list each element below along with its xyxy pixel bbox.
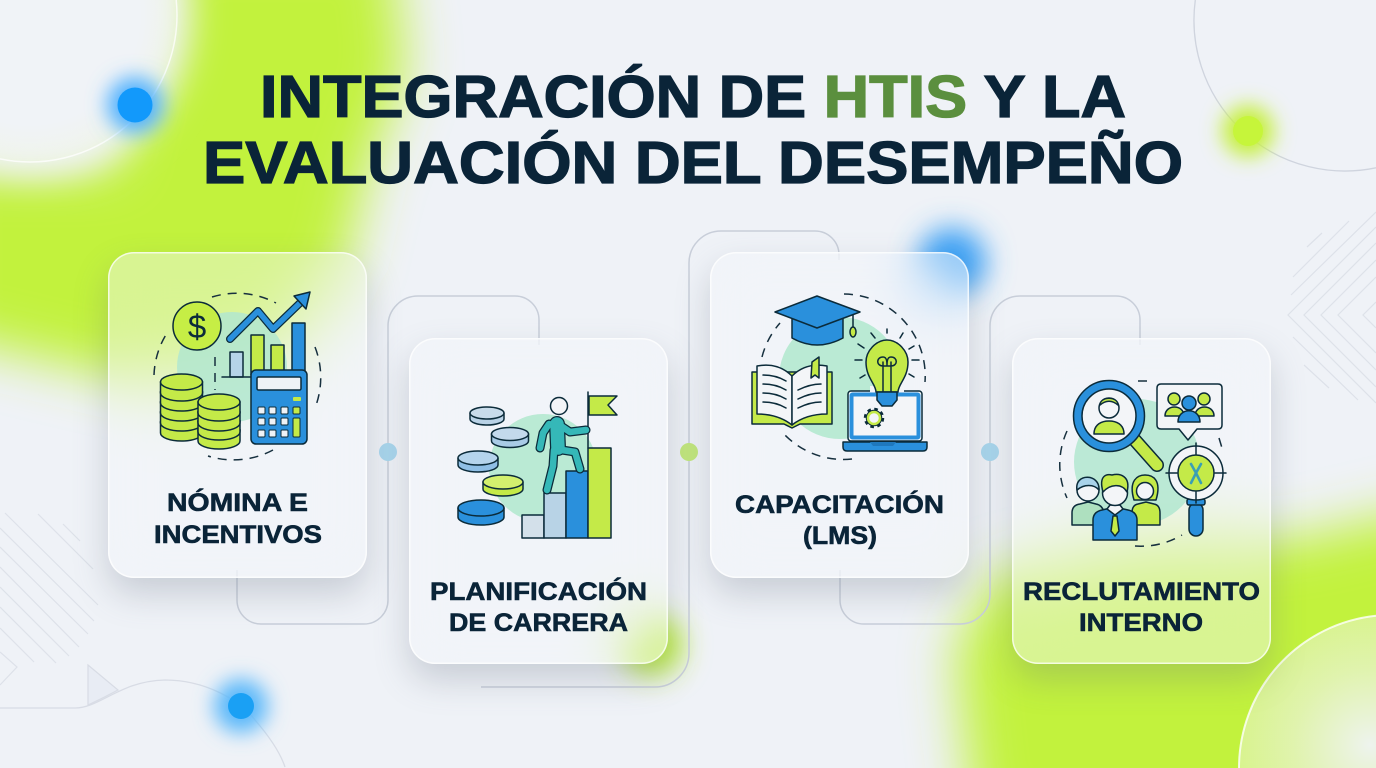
connector lines <box>237 231 1140 687</box>
label: capacitación lms: (LMS) <box>803 522 877 550</box>
green blob top left <box>10 10 475 455</box>
soft white haze around top left circle <box>20 5 340 325</box>
panel: nómina e incentivos <box>108 252 367 578</box>
label: nómina e incentivos: INCENTIVOS <box>154 521 322 549</box>
wave line bottom left <box>0 665 285 767</box>
label: planificación de carrera: DE CARRERA <box>449 609 628 637</box>
icon: money and growth: $ <box>188 308 206 345</box>
green blob bottom right <box>885 435 1370 760</box>
label: reclutamiento interno: INTERNO <box>1079 609 1203 637</box>
glowing dot: blue bottom left <box>214 679 268 733</box>
label: capacitación lms: CAPACITACIÓN <box>735 489 944 519</box>
label: planificación de carrera: PLANIFICACIÓN <box>430 576 647 606</box>
glow: green behind card 2 corner <box>622 615 682 675</box>
label: nómina e incentivos <box>154 487 322 549</box>
label: capacitación lms <box>735 489 944 550</box>
label: nómina e incentivos: NÓMINA E <box>167 487 308 517</box>
title: EVALUACIÓN DEL DESEMPEÑO <box>203 130 1183 196</box>
glowing dot: blue top left <box>107 77 163 133</box>
chevron pattern right <box>1288 212 1376 403</box>
connector node: green <box>680 443 698 461</box>
panel: planificación de carrera <box>409 338 668 664</box>
glow: blue top right of card 3 <box>918 228 986 296</box>
glass circle bottom right <box>1239 616 1376 768</box>
label: reclutamiento interno <box>1023 578 1260 637</box>
title <box>203 64 1183 196</box>
label: reclutamiento interno: RECLUTAMIENTO <box>1023 578 1260 606</box>
glowing dot: green top right <box>1222 105 1274 157</box>
connector node: light blue <box>981 443 999 461</box>
panel: reclutamiento interno <box>1012 338 1271 664</box>
panel: capacitación lms <box>710 252 969 578</box>
label: planificación de carrera <box>430 576 647 637</box>
outline circle top right <box>1194 0 1376 171</box>
glass circle top left <box>0 0 177 162</box>
icon: money and growth <box>154 292 321 460</box>
icon: recruiting <box>1060 380 1226 546</box>
icon: learning <box>752 294 927 459</box>
line pattern left <box>0 513 98 685</box>
title: INTEGRACIÓN DE HTIS Y LA <box>260 64 1126 130</box>
icon: career steps <box>458 392 617 538</box>
connector node: blue <box>379 443 397 461</box>
